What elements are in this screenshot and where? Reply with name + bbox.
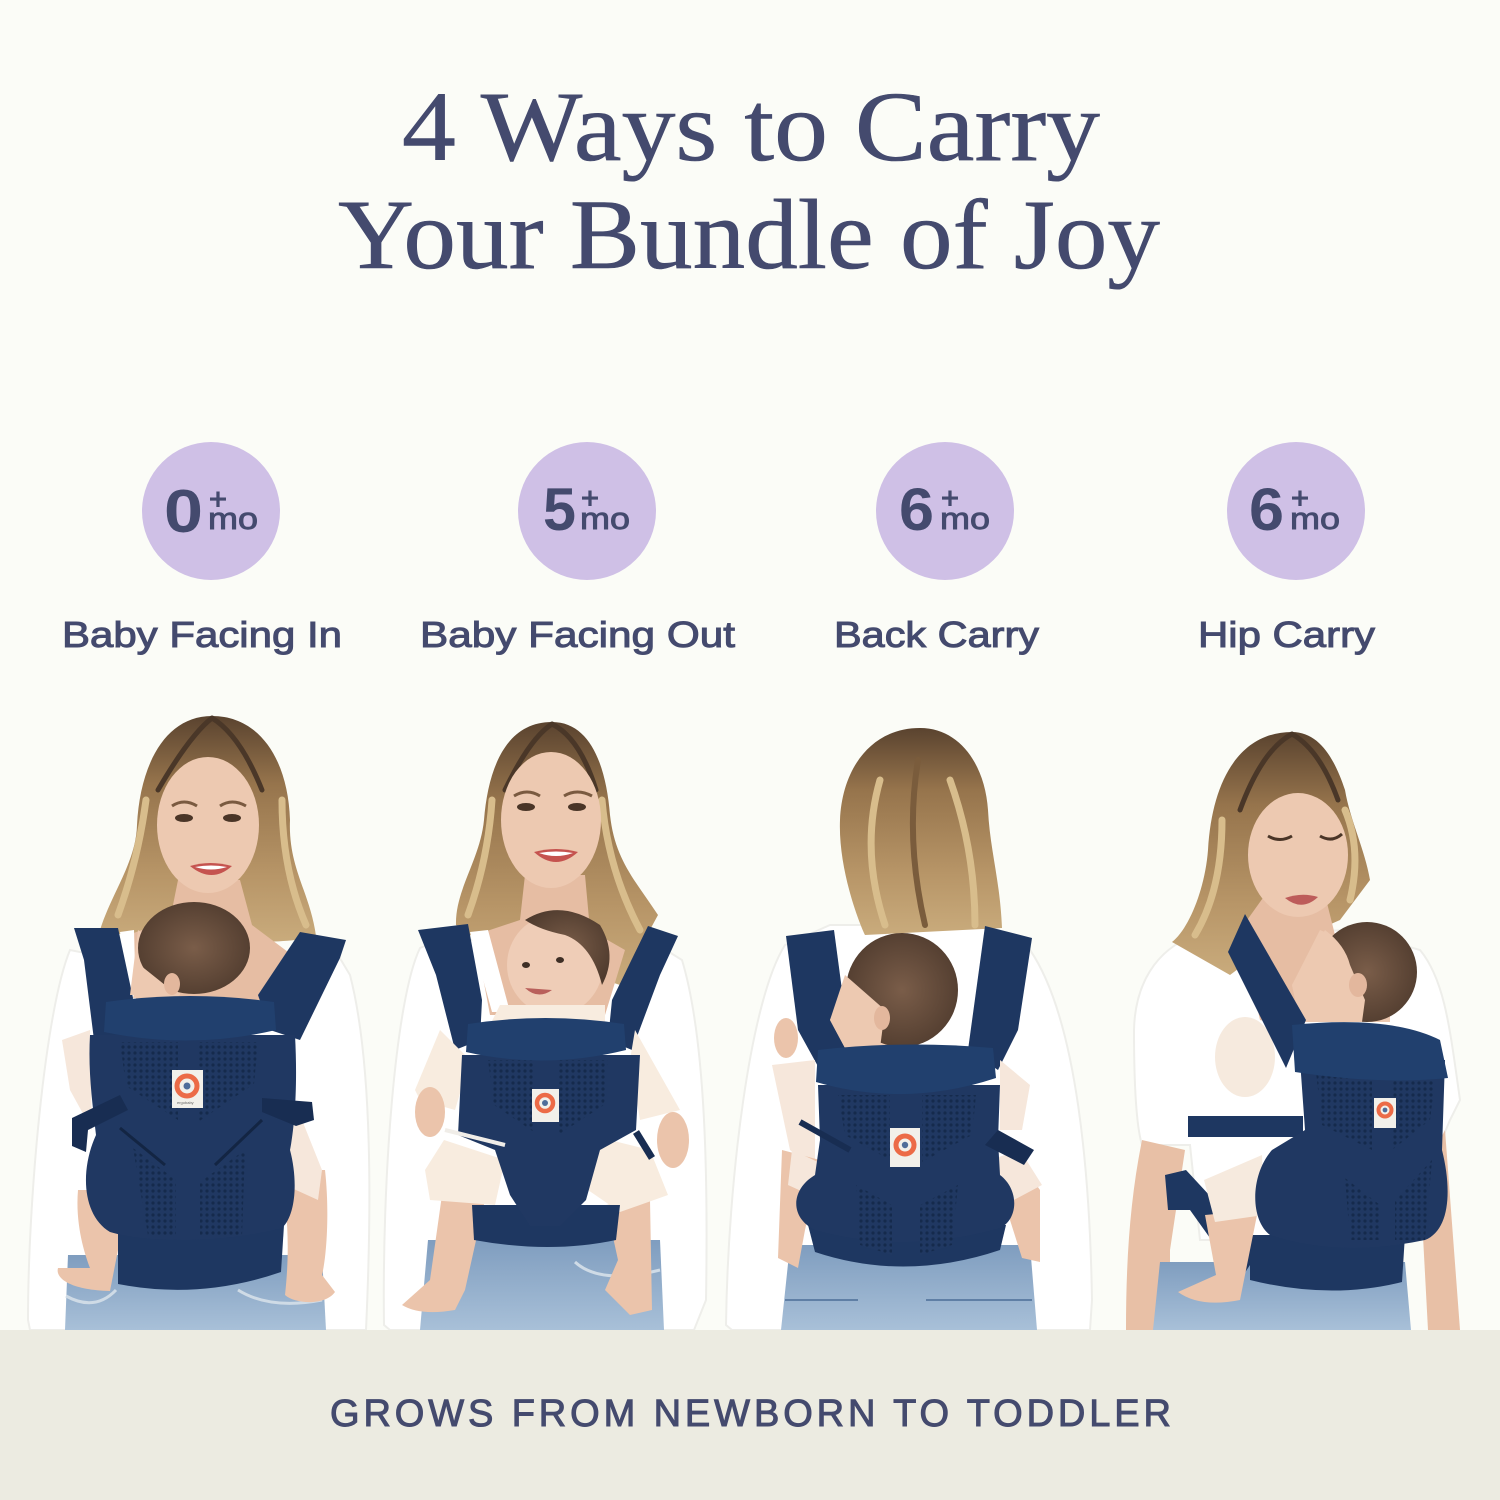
carrier hood flap [104,996,276,1041]
figure: hip carry [1126,732,1460,1330]
carrier waistband [808,1225,1006,1267]
figure: back carry [726,728,1092,1330]
neck and chest [128,880,288,1000]
hair [1172,732,1370,975]
baby head [507,910,610,1015]
age badge: 0+ months: mo [208,501,258,536]
age badge: 5+ months: + [581,482,599,515]
logo tag [890,1128,920,1167]
baby head [1292,922,1417,1022]
side buckles [72,1095,314,1165]
mesh panels [838,1095,976,1255]
mother torso and shirt [384,940,707,1330]
face [157,757,259,893]
label: baby facing out: Baby Facing Out [420,614,735,655]
age badge: 6+ months: + [1291,482,1309,515]
carrier straps [786,926,1032,1070]
baby legs [778,1150,1042,1268]
panel: hip carry label [1198,442,1375,655]
hair [100,716,316,942]
panel: back carry label [834,442,1039,655]
baby arms [772,1018,1030,1170]
jeans [420,1240,664,1330]
carrier waistband [1250,1235,1405,1291]
neck and chest [1240,895,1335,1030]
mother torso and shirt [28,950,369,1330]
age badge: 0+ months: 0 [164,478,203,545]
jeans [65,1255,326,1330]
mesh panels [488,1060,608,1135]
baby legs and feet [402,1135,668,1315]
label: back carry: Back Carry [834,614,1039,655]
label: baby facing in: Baby Facing In [62,614,342,655]
footer text: GROWS FROM NEWBORN TO TODDLER [330,1393,1171,1435]
baby legs and feet [58,1030,335,1302]
carrier body [86,1035,296,1240]
baby legs and feet [1178,1155,1264,1303]
carrier body [1255,1060,1448,1248]
title: 4 Ways to Carry [402,71,1100,182]
neck and chest [475,875,625,1015]
carrier hood flap [1292,1022,1448,1080]
hair [840,728,1002,935]
logo tag: ergobaby [177,1100,194,1105]
carrier body [796,1085,1014,1242]
logo tag [172,1070,203,1108]
age badge: 6+ months: mo [1290,501,1340,536]
age badge: 6+ months: 6 [899,476,934,543]
age badge: 0+ months: + [209,483,227,516]
hair [456,722,658,985]
side buckles [800,1122,1034,1165]
jeans [781,1245,1037,1330]
figure: baby facing out [384,722,707,1330]
logo tag [1374,1098,1396,1128]
panel: baby facing in label [62,442,342,655]
carrier hood flap [816,1044,996,1094]
age badge: 6+ months: mo [940,501,990,536]
title [338,71,1160,290]
logo tag [532,1089,559,1122]
hip belt and buckle [1165,1116,1303,1280]
baby head [130,902,250,998]
carrier body [458,1055,640,1226]
carrier waistband [472,1205,620,1247]
panel: baby facing out label [420,442,735,655]
carrier straps [418,924,678,1050]
title: Your Bundle of Joy [338,179,1160,290]
side buckles [445,1130,652,1158]
age badge: 6+ months: 6 [1249,476,1284,543]
age badge: 6+ months: + [941,482,959,515]
mother back and shirt [726,925,1092,1330]
mother arms [1126,1130,1460,1330]
age badge: 6+ months [876,442,1014,580]
mother shirt [1134,930,1460,1240]
mesh panels [120,1042,258,1236]
baby head [830,933,958,1048]
carrier waistband [118,1225,284,1290]
shirt neckline strip [120,930,136,1000]
age badge: 5+ months: 5 [543,476,576,543]
jeans [1153,1262,1411,1330]
age badge: 5+ months: mo [580,501,630,536]
mesh panels [1316,1072,1436,1240]
baby shirt collar and arms [415,1005,689,1168]
age badge: 0+ months [142,442,280,580]
face [1248,793,1348,917]
age badge: 5+ months [518,442,656,580]
baby arm sleeve [1215,1017,1275,1097]
label: hip carry: Hip Carry [1198,614,1375,655]
figure: baby facing in [28,716,369,1330]
age badge: 6+ months [1227,442,1365,580]
carrier straps [74,928,346,1040]
carrier strap [1228,914,1306,1068]
footer band [0,1330,1500,1500]
carrier hood flap [466,1018,626,1061]
face [501,752,601,888]
